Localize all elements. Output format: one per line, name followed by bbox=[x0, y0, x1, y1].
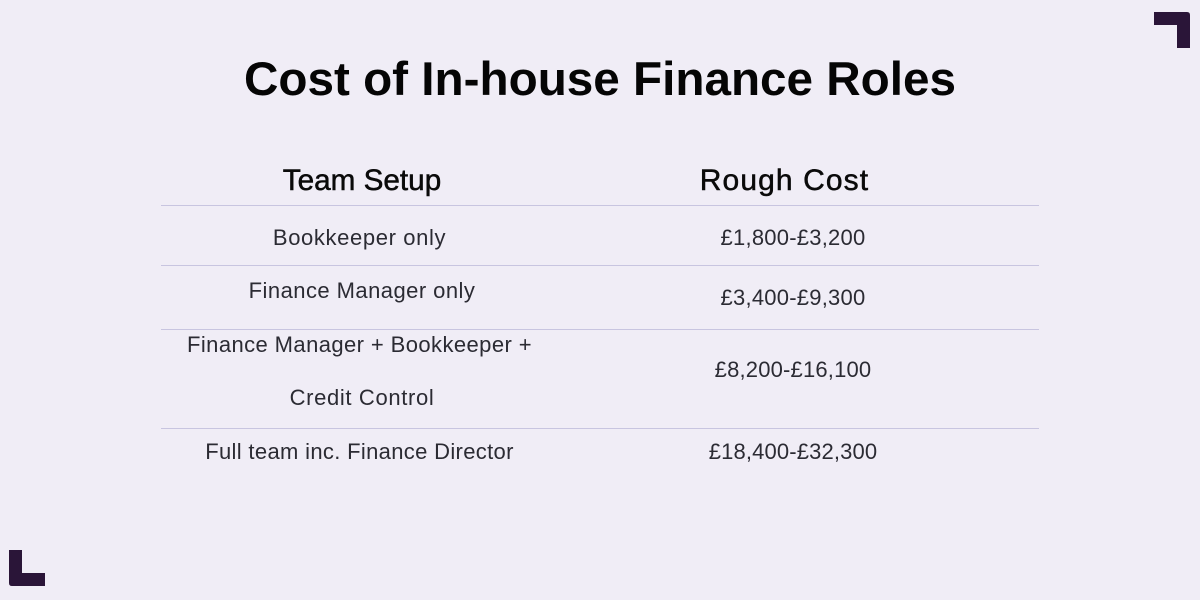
icon: top right corner bracket bbox=[1154, 12, 1190, 48]
row 3 cost: £8,200-£16,100 bbox=[715, 357, 871, 382]
row 4 cost: £18,400-£32,300 bbox=[709, 439, 877, 464]
row 3 label bbox=[187, 332, 532, 410]
title: Cost of In-house Finance Roles bbox=[244, 53, 956, 106]
column heading: rough cost: Rough Cost bbox=[700, 164, 869, 197]
row 1 cost: £1,800-£3,200 bbox=[721, 225, 865, 250]
row 4 label: Full team inc. Finance Director bbox=[205, 439, 514, 464]
row 2 label: Finance Manager only bbox=[249, 278, 475, 303]
row 3 label: Credit Control bbox=[290, 385, 434, 410]
row 1 label: Bookkeeper only bbox=[273, 225, 446, 250]
table bbox=[161, 164, 1039, 464]
row 2 cost: £3,400-£9,300 bbox=[721, 285, 865, 310]
row 3 label: Finance Manager + Bookkeeper + bbox=[187, 332, 532, 357]
icon: bottom left corner bracket bbox=[9, 550, 45, 586]
column heading: team setup: Team Setup bbox=[283, 164, 441, 197]
